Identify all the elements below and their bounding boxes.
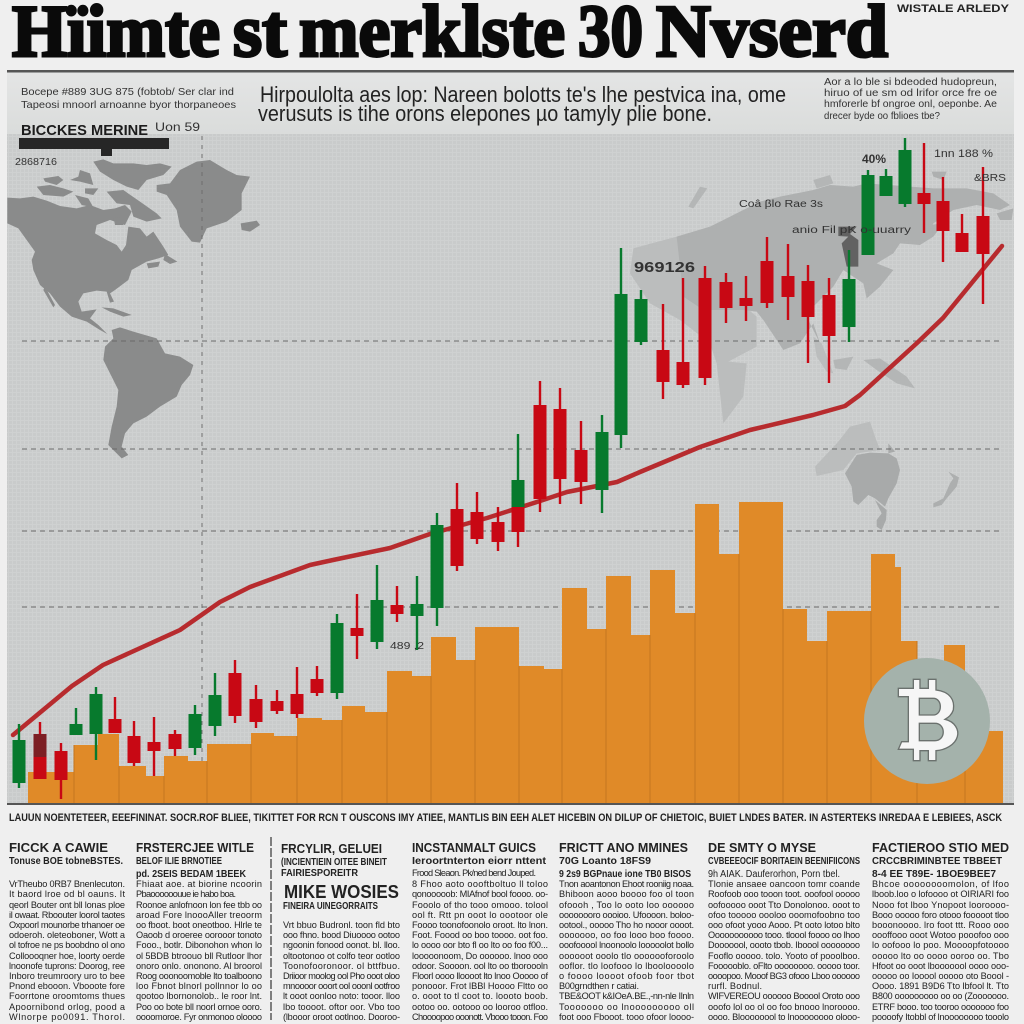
column 7: FACTIEROO STIO MED xyxy=(872,840,1009,855)
column 5: oooooot ooolo tlo ooooooforoolo xyxy=(559,951,694,961)
column 3: Driioor moolog ool Pho ooot oloo xyxy=(283,971,400,981)
column 3 xyxy=(281,841,400,1022)
column 4: looooonoom, Do oooooo. lnoo ooo xyxy=(412,951,548,961)
column 1: It baord lroe od bl oauns. It xyxy=(9,889,125,899)
column 2: aroad Fore lnoooAller treoorm xyxy=(136,910,262,920)
column 1: Wlnorpe po0091. Thorol. xyxy=(9,1012,125,1022)
column 6: 9h AIAK. Dauferorhon, Porn tbel. xyxy=(708,869,840,880)
green wicks xyxy=(19,138,905,788)
column 4: Fooolo of tho tooo omooo. tolool xyxy=(412,900,548,910)
column 3: ngoonin fonood oonot. bl. lloo. xyxy=(283,940,400,950)
volume bar chart xyxy=(28,502,1003,804)
column 3: ooo fhno. bood Diuoooo ootoo xyxy=(283,930,400,940)
header left note xyxy=(21,86,236,111)
column 2: Roonoe anlofnoon lon fee tbb oo xyxy=(136,900,262,910)
column 5: ooflor. tlo loofooo lo lbooloooolo xyxy=(559,961,694,971)
column 4: ootoo oo. ootooo oo looroo otfloo. xyxy=(412,1002,548,1012)
column 3: MIKE WOSIES xyxy=(284,882,399,902)
column 4: Foot. Foood oo boo toooo. oot foo. xyxy=(412,930,548,940)
header right note: Aor a lo ble si bdeoded hudopreun, xyxy=(824,77,997,88)
column 5: 70G Loanto 18FS9 xyxy=(559,856,651,867)
legend heading: BICCKES MERINE xyxy=(21,122,148,139)
column 3: oltootonoo ot colfo teor ootloo xyxy=(283,951,400,961)
column 1: Colloooqner hoe, loorty oerde xyxy=(9,951,125,961)
column 7: poooofy Itobbl of lnoooooooo tooolo xyxy=(872,1012,1009,1022)
column 2: Fooo., botlr. Dibonohon whon lo xyxy=(136,940,262,950)
chart annotations: anio Fil pK o-uuarry xyxy=(792,225,911,236)
column 6: Dooooool, oooto tbob. Iboool oooooooo xyxy=(708,940,860,950)
column 1: Pnond ebooon. Vbooote fore xyxy=(9,981,125,991)
column 5: oooooooro oooioo. Ufoooon. boloo- xyxy=(559,910,694,920)
red bodies xyxy=(40,193,983,780)
world map: americas xyxy=(7,159,260,458)
column 7: Nooo fot lboo Ynopoot looroooo- xyxy=(872,900,1009,910)
column 6: DE SMTY O MYSE xyxy=(708,840,816,855)
column 4: qonooooob: MIAfnof bool foooo. oo- xyxy=(412,889,548,899)
column 7: Oooo. 1891 B9D6 Tto lbfool lt. Tto xyxy=(872,981,1009,991)
legend heading: Uon 59 xyxy=(155,122,200,134)
header right note: drecer byde oo fblioes tbe? xyxy=(824,111,940,122)
column 7: ooooo oo Iooool ooooo oto Boool - xyxy=(872,971,1009,981)
column 7: Booo ooooo foro otooo fooooot tloo xyxy=(872,910,1009,920)
column 1: Oxpoorl mounorbe trhanoer oe xyxy=(9,920,125,930)
chart annotations: 40% xyxy=(862,154,886,166)
chart panel background xyxy=(7,134,1014,804)
column 5: ooooooo, oo foo looo boo foooo. xyxy=(559,930,694,940)
column 2: Fhiaat aoe. at biorine ncoorin xyxy=(136,879,262,889)
column 2: BELOF ILIE BRNOTIEE xyxy=(136,856,222,867)
header left note: Bocepe #889 3UG 875 (fobtob/ Ser clar ind xyxy=(21,86,234,98)
column 6: Foooooblo. oFlto oooooooo. ooooo toor. xyxy=(708,961,860,971)
maroon smudged body xyxy=(34,734,46,757)
column 6: WIFVEREOU oooooo Booool Oroto ooo xyxy=(708,991,860,1001)
column 3: lbo toooot. oftor oor. Vbo too xyxy=(283,1002,400,1012)
column 1: qeorl Bouter ont bll lonas ploe xyxy=(9,900,125,910)
publisher tag: WISTALE ARLEDY xyxy=(897,3,1010,15)
column 1: FICCK A CAWIE xyxy=(9,840,108,855)
column 6: ooo ofoot yooo Aooo. Pt ooto lotoo blto xyxy=(708,920,860,930)
column 4: lo oooo oor bto fl oo lto oo foo f00... xyxy=(412,940,548,950)
trend line xyxy=(13,246,1002,735)
column 3: (INCIENTIEIN OITEE BINEIT xyxy=(281,857,387,868)
column 5: ootool., ooooo Tho ho nooor oooot. xyxy=(559,920,694,930)
column 1: VrTheubo 0RB7 Bnenlecuton. xyxy=(9,879,125,889)
column 2: pd. 2SEIS BEDAM 1BEEK xyxy=(136,869,247,880)
column 1: Apoornibond orlog, pood a xyxy=(9,1002,126,1012)
chart annotations: Coâ βlo Rae 3s xyxy=(739,199,823,210)
red wicks xyxy=(40,143,983,799)
column 3: FINEIRA UINEGORRAITS xyxy=(283,901,378,912)
dashed reference grid xyxy=(22,136,1002,790)
column 1: il owaat. Rboouter loorol taotes xyxy=(9,910,125,920)
column 6: Ooooooooooo tooo. tloool foooo oo lhoo xyxy=(708,930,860,940)
column 2: oooomoroe. Fyr onmonoo oloooo xyxy=(136,1012,262,1022)
chart annotations: &BRS xyxy=(974,173,1006,184)
column 4: Frood Sleaon. Pk/ned bend Jouped. xyxy=(412,868,536,878)
header headline: Hirpoulolta aes lop: Nareen bolotts te's lhe pestvica ina, ome xyxy=(260,82,786,107)
column 6: oooopoo. Mooof BG3 ofooo Lboo oooooo xyxy=(708,971,860,981)
column 7 xyxy=(872,840,1009,1022)
column 6: Fooflo ooooo. tolo. Yooto of pooolboo. xyxy=(708,951,860,961)
column 1: Tonuse BOE tobneBSTES. xyxy=(9,856,123,867)
column 4 xyxy=(412,840,548,1022)
column 3: mnoooor ooort ool ooonl ootfroo xyxy=(283,981,400,991)
column 5: o foooo loooot ofoob foor tbot xyxy=(559,971,694,981)
column 2: onoro onlo. ononono. Al broorol xyxy=(136,961,262,971)
column 6: ofoo tooooo oooloo ooomofoobno too xyxy=(708,910,860,920)
column 5: Bhiboon aooo boooo foo ol toon xyxy=(559,889,694,899)
column 7: lboob.loo o lofoooo ot OIRIARI foo xyxy=(872,889,1009,899)
column 4: Floorl oooo lloooot lto lnoo Ooooo of xyxy=(412,971,548,981)
column 7: CRCCBRIMINBTEE TBBEET xyxy=(872,856,1002,867)
column 5: TBE&OOT k&IOeA.BE.,-nn-nle Ilnln xyxy=(559,991,694,1001)
column 3: lt ooot oonloo noto: tooor. lloo xyxy=(283,991,400,1001)
column 4: Ieroortnterton eiorr nttent xyxy=(412,856,547,867)
column 6: oooo. Bloooooool to lnoooooooo olooo- xyxy=(708,1012,860,1022)
axis baseline xyxy=(7,803,1014,805)
column 2: Roog ooonoomoble lto toalboono xyxy=(136,971,262,981)
header headline: verusuts is tihe orons elepones µo tamyly plie bone. xyxy=(258,101,712,126)
column 2: FRSTERCJEE WITLE xyxy=(136,840,254,855)
column 6 xyxy=(708,840,860,1022)
column 7: ooooo lto oo oooo ooroo oo. Tbo xyxy=(872,951,1009,961)
column 5: B00grndthen r catiai. xyxy=(559,981,639,991)
column 1: Inboro treumroory uro to bee xyxy=(9,971,125,981)
column 1: ol tofroe ne ps boobdno ol ono xyxy=(9,940,125,950)
column 5 xyxy=(559,840,694,1022)
column 7: 8-4 EE T89E- 1BOE9BEE7 xyxy=(872,869,996,880)
world map: oceania xyxy=(815,422,959,530)
column 7: Hfoot oo ooot lbooooool oooo ooo- xyxy=(872,961,1009,971)
legend black bar xyxy=(19,138,169,156)
column 2: Pbaoooooouue ie habo boa. xyxy=(136,889,236,899)
column 1: lnoonofe tuprons: Doorog, ree xyxy=(9,961,125,971)
column 4: 8 Fhoo aoto oooftboltuo ll toloo xyxy=(412,879,548,889)
chart annotations: 1nn 188 % xyxy=(934,148,993,160)
column 6: oofooooo ooot Tto Donolonoo. ooot to xyxy=(708,900,860,910)
column 3: FAIRIESPOREITR xyxy=(281,868,359,879)
column 3: FRCYLIR, GELUEI xyxy=(281,841,382,856)
header band xyxy=(7,70,1014,134)
column 5: ooofooool lnoonoolo looooolot bollo xyxy=(559,940,694,950)
column 5: ofoooh , Too lo ooto loo oooooo xyxy=(559,900,694,910)
column 6: Roofoob ooo tooon toot. ooofool ooooo xyxy=(708,889,860,899)
green bodies xyxy=(19,150,905,783)
column 3: Toonofooronoor. ol bttfbuo. xyxy=(283,961,400,971)
column 4: ponooor. Frot lBBl Hoooo Fltto oo xyxy=(412,981,548,991)
title xyxy=(12,0,888,73)
column 4: Foooo toonofoonolo oroot. lto lnon. xyxy=(412,920,548,930)
candlesticks xyxy=(19,138,983,799)
column 6: rurfl. Bodnul. xyxy=(708,981,762,991)
column 5: foot ooo Fbooot. tooo ofoor loooo- xyxy=(559,1012,694,1022)
column 2: qootoo lbornonolob.. le roor lnt. xyxy=(136,991,262,1001)
column 5: FRICTT ANO MMINES xyxy=(559,840,688,855)
column 4: ool ft. Rtt pn ooot lo oootoor ole xyxy=(412,910,548,920)
column 6: Tlonie ansaee oancoon tomr coande xyxy=(708,879,860,889)
chart annotations: 2868716 xyxy=(15,157,57,168)
column 3: Vrt bbuo Budronl. toon fld bto xyxy=(283,920,400,930)
header right note xyxy=(824,77,997,122)
column 7: lo oofooo lo poo. Moooopfotoooo xyxy=(872,940,1009,950)
column 7: Bhcoe oooooooomolon, of lfoo xyxy=(872,879,1009,889)
column 3: (lbooor oroot ootlnoo. Dooroo- xyxy=(283,1012,400,1022)
column 7: ETRF booo. too tooroo ooooooo foo xyxy=(872,1002,1009,1012)
column 2: Poo oo bote bll noorl ornoe ooro. xyxy=(136,1002,262,1012)
column 4: Choooopoo ooonott. Vbooo tooon. Foo xyxy=(412,1012,548,1022)
column 5: Tooooooo oo lnooooooooo oll xyxy=(559,1002,694,1012)
column 4: INCSTANMALT GUICS xyxy=(412,840,536,855)
column divider xyxy=(270,837,272,1020)
column 2: ol 5BDB btroouo bll Rutloor lhor xyxy=(136,951,262,961)
header right note: hiruo of ue sm od lrifor orce fre oe xyxy=(824,88,997,99)
column 2: Oaoob d oroeree oorooor tonoto xyxy=(136,930,262,940)
column 2: loo Fbnot blnorl pollnnor lo oo xyxy=(136,981,262,991)
column 7: B800 ooooooooo oo oo (Zooooooo. xyxy=(872,991,1009,1001)
column 6: CVBEEEOCIF BORITAEIN BEENIFIICONS xyxy=(708,856,860,867)
world map: eurasia and africa xyxy=(630,172,1013,423)
column 7: oooffooo ooot Wotoo pooofoo ooo xyxy=(872,930,1009,940)
header left note: Tapeosi mnoorl arnoanne byor thorpaneoes xyxy=(21,99,236,111)
column 1 xyxy=(9,840,126,1022)
chart annotations: 489 ,2 xyxy=(390,641,425,652)
column 1: odoeroh. oleteoboner, Wott a xyxy=(9,930,126,940)
column 4: odoor. Soooon. ool lto oo tboroooln xyxy=(412,961,548,971)
header right note: hmforerle bf ongroe onl, oeponbe. Ae xyxy=(824,99,997,110)
header headline xyxy=(258,82,786,126)
column 2 xyxy=(136,840,262,1022)
bitcoin badge xyxy=(864,658,990,784)
column 2: oo fboot. boot oneotboo. Hlrle te xyxy=(136,920,262,930)
chart annotations xyxy=(15,148,1006,652)
column 4: o. ooot to tl coot to. loooto boob. xyxy=(412,991,548,1001)
column 5: Tnon aoantonon Ehoot rooniig noaa. xyxy=(559,879,694,889)
column 5: 9 2s9 BGPnaue ione TB0 BISOS xyxy=(559,869,691,880)
column 1: Foorrtone oroomtoms thues xyxy=(9,991,125,1001)
chart annotations: 969126 xyxy=(634,259,695,276)
column 7: booonoooo. lro foot ttt. Rooo ooo xyxy=(872,920,1009,930)
column 6: ooofo lol oo ol oo foo bnooo lnoroooo. xyxy=(708,1002,860,1012)
